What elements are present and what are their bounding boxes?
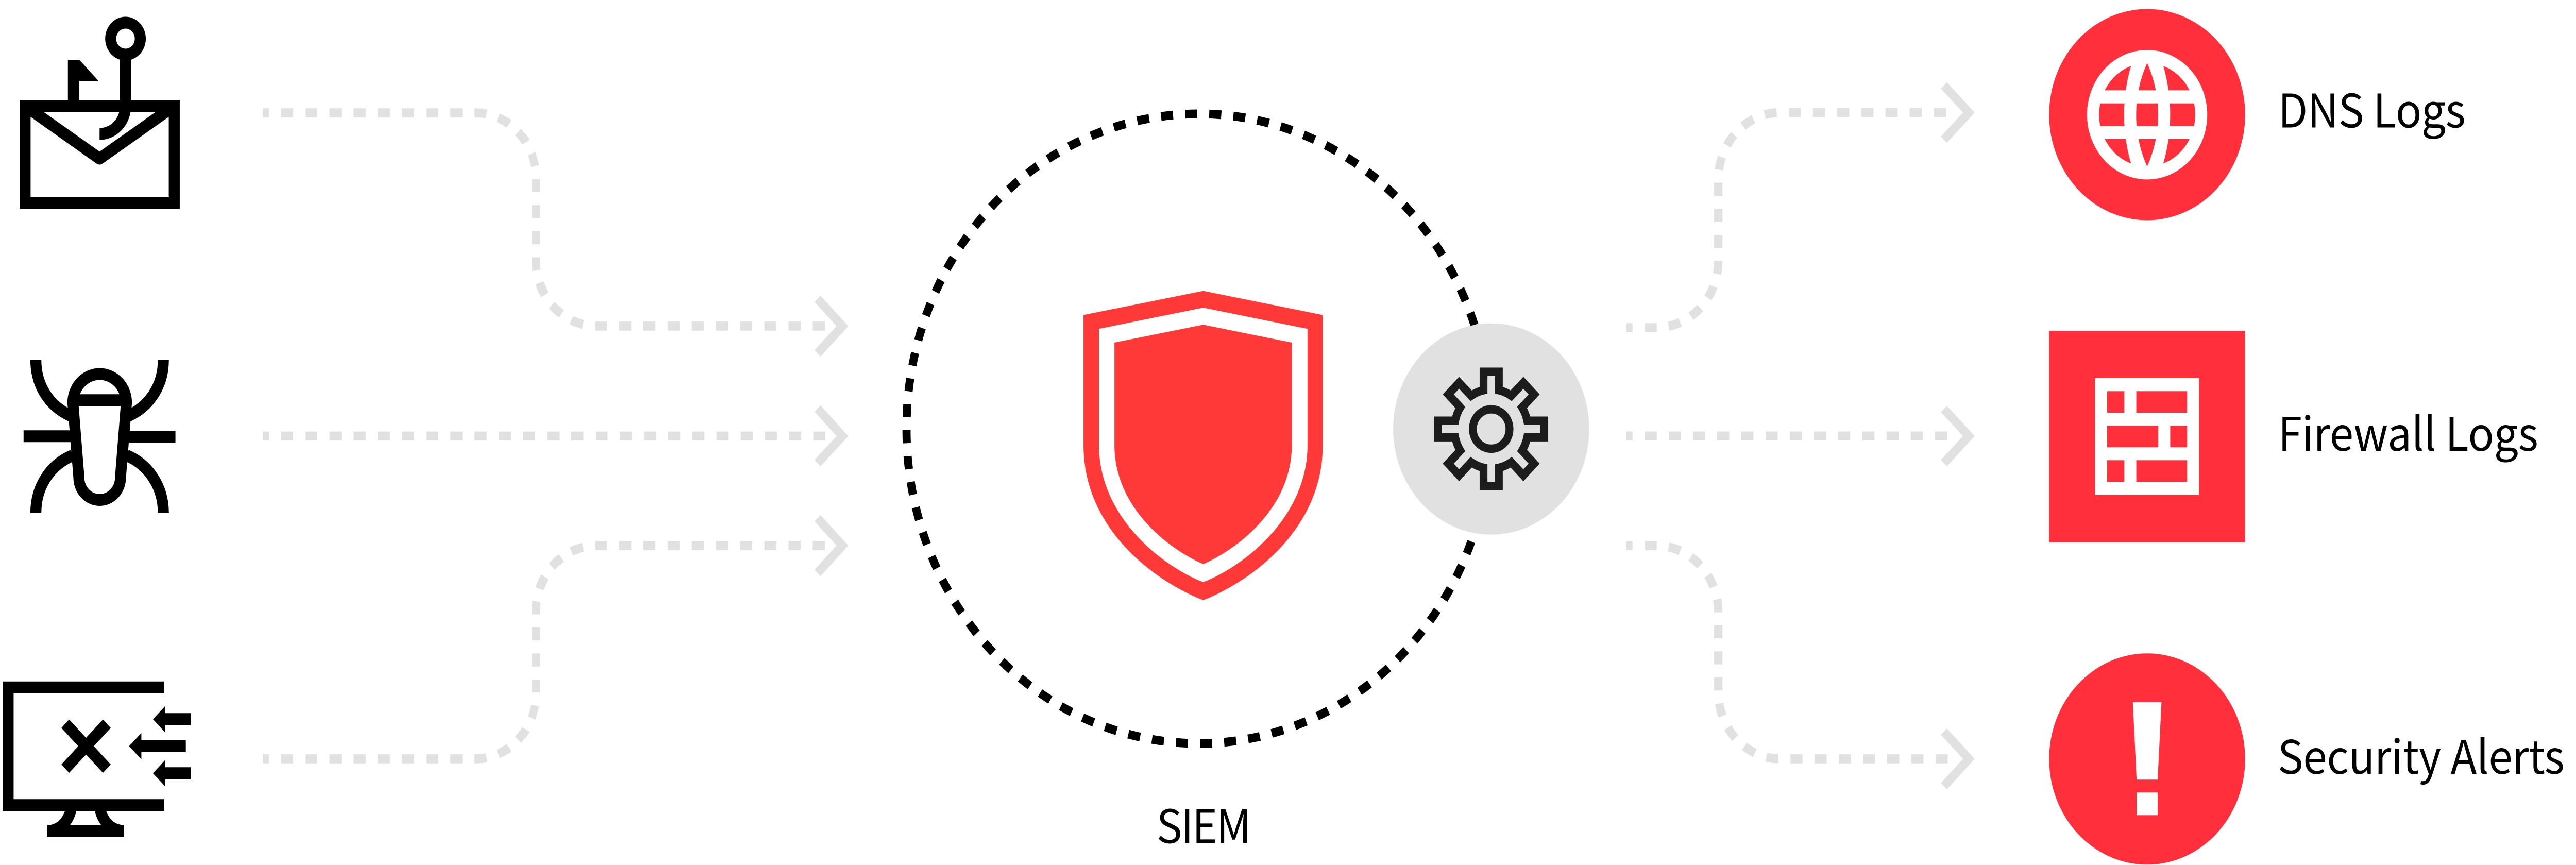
label: Security Alerts: Security Alerts [2278, 720, 2565, 788]
icon: gear badge [1393, 324, 1589, 535]
icon: malware bug [24, 360, 176, 513]
icon: monitor under attack [8, 687, 191, 831]
arrow: malware to SIEM [263, 409, 842, 463]
arrow: SIEM to security alerts [1626, 546, 1969, 786]
arrow: phishing to SIEM [263, 113, 842, 353]
arrow: SIEM to firewall logs [1626, 409, 1969, 463]
arrow: SIEM to DNS logs [1626, 86, 1969, 328]
SIEM dotted ring [906, 114, 1490, 743]
icon: firewall [2049, 331, 2245, 542]
icon: security alert [2049, 653, 2245, 864]
arrow: attack to SIEM [263, 518, 842, 759]
icon: SIEM shield [1083, 291, 1323, 600]
label: SIEM: SIEM [1157, 790, 1251, 857]
icon: phishing envelope [25, 23, 174, 203]
icon: DNS globe [2049, 9, 2245, 221]
label: Firewall Logs: Firewall Logs [2278, 397, 2538, 465]
label: DNS Logs: DNS Logs [2278, 74, 2466, 141]
